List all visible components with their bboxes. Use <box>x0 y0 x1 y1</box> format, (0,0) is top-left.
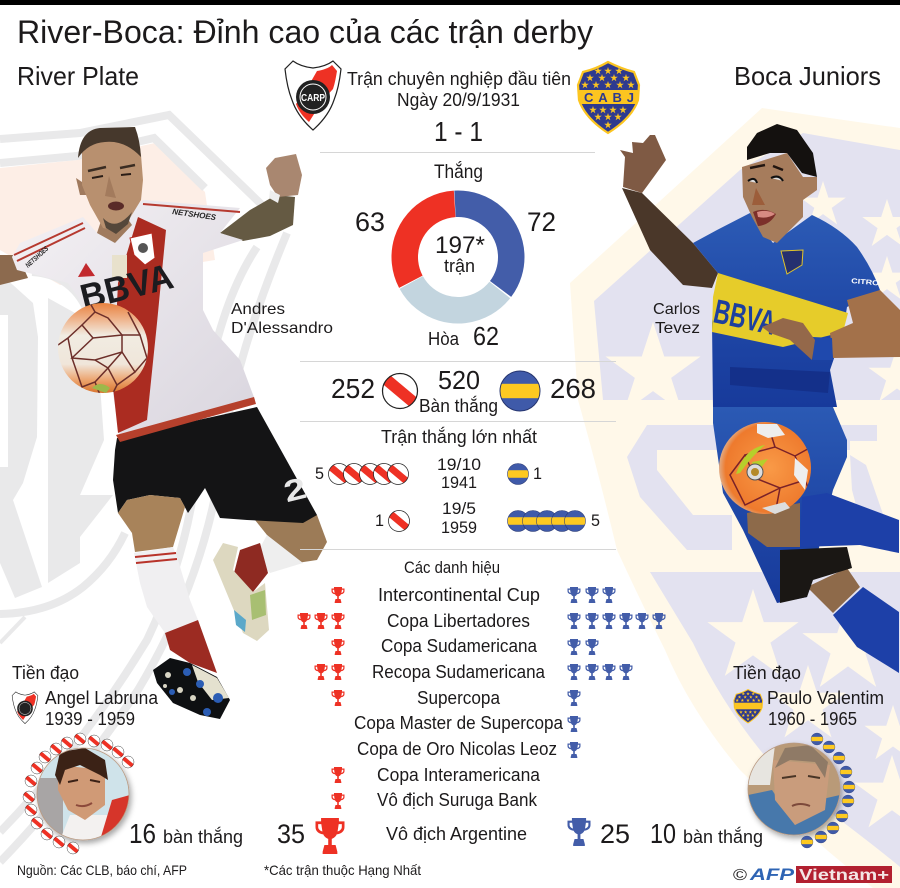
heading: River Plate: River Plate <box>17 61 139 91</box>
panel: River top scorer: 1939 - 1959 <box>45 709 135 729</box>
title names: Supercopa <box>417 688 501 708</box>
panel: Boca top scorer: Paulo Valentim <box>767 688 884 708</box>
icon: small River crest <box>12 692 38 724</box>
heading: wins: Thắng <box>434 161 483 183</box>
title names: Copa Interamericana <box>377 765 541 785</box>
heading: main title: River-Boca: Đỉnh cao của các trận derby <box>17 14 593 50</box>
head <box>76 127 143 243</box>
biggest wins: 1959 <box>441 518 477 537</box>
titles table <box>277 558 666 854</box>
jersey crest <box>781 250 803 274</box>
photo: Paulo Valentim <box>748 743 840 840</box>
icon: River Plate crest: CARP <box>301 93 325 104</box>
title names: Copa Master de Supercopa <box>354 713 564 733</box>
donut chart: wins and draws <box>355 161 556 351</box>
biggest wins: 1 <box>533 464 542 483</box>
background: Boca Juniors crest watermark <box>570 108 900 888</box>
title names: Recopa Sudamericana <box>372 662 546 682</box>
panel: River top scorer: Angel Labruna <box>45 688 159 708</box>
goals comparison: Bàn thắng <box>419 395 498 416</box>
title names: Copa Sudamericana <box>381 636 538 656</box>
icon: Boca Juniors crest <box>578 62 639 133</box>
biggest wins: Trận thắng lớn nhất <box>381 426 537 447</box>
text block: first professional match: Trận chuyên nghiệp đầu tiên <box>347 69 571 89</box>
jersey logos: NETSHOES <box>172 207 217 222</box>
goals comparison <box>331 365 596 416</box>
biggest wins: 19/10 <box>437 455 481 474</box>
head <box>742 124 817 243</box>
icon: small Boca crest <box>734 690 763 723</box>
River scorer goals: 16 <box>129 818 156 849</box>
jersey <box>693 213 880 407</box>
shorts number: 2 <box>280 472 310 509</box>
heading: titles: Các danh hiệu <box>404 558 500 577</box>
football <box>719 422 815 514</box>
shorts <box>713 400 847 603</box>
player name: D'Alessandro <box>231 301 333 337</box>
total matches unit: trận <box>444 256 475 276</box>
jersey crest <box>130 233 155 265</box>
title names <box>354 585 564 844</box>
heading: Boca Juniors: Boca Juniors <box>734 61 881 91</box>
title names: Copa Libertadores <box>387 611 530 631</box>
text block: first professional match: 1 - 1 <box>434 116 483 147</box>
Boca 5 goals <box>508 510 586 532</box>
jersey logos: BBVA <box>76 255 177 318</box>
top black bar <box>0 0 900 5</box>
goals comparison: 520 <box>438 365 480 395</box>
title names: Intercontinental Cup <box>378 585 540 605</box>
Boca league titles: 25 <box>600 819 630 849</box>
player name: Tevez: Tevez <box>655 320 700 337</box>
text block: first professional match <box>347 69 571 147</box>
panel: Boca top scorer: 1960 - 1965 <box>768 709 857 729</box>
biggest wins: 5 <box>315 464 324 483</box>
sleeve logo: CITRO <box>851 278 880 287</box>
biggest wins: 1941 <box>441 473 477 492</box>
thigh <box>747 503 800 547</box>
credit: AFP Vietnam+: AFP <box>749 865 795 884</box>
icon: Boca ball <box>500 371 540 411</box>
raised arm <box>620 135 718 288</box>
panel: Boca top scorer <box>650 663 884 849</box>
player name: Tevez <box>653 301 700 337</box>
sponsor text: BBVA <box>710 293 779 343</box>
River trophies <box>298 587 344 854</box>
Boca scorer goals <box>650 818 763 849</box>
total matches: 197* <box>435 232 485 259</box>
forearm and hand <box>762 290 900 360</box>
Boca trophies <box>568 587 666 846</box>
Boca goal balls <box>801 733 855 848</box>
shorts <box>113 407 317 523</box>
goals comparison: 252 <box>331 373 375 404</box>
text block: first professional match: Ngày 20/9/1931 <box>397 90 520 110</box>
yellow band <box>712 273 848 347</box>
goals comparison: 268 <box>550 373 596 404</box>
River scorer goals: bàn thắng <box>163 826 243 847</box>
player name: D'Alessandro: D'Alessandro <box>231 320 333 337</box>
River 5 goals <box>326 462 411 486</box>
title names: Vô địch Argentine <box>386 824 527 844</box>
credit: AFP Vietnam+: © <box>733 867 747 884</box>
biggest wins: 5 <box>591 511 600 530</box>
right arm <box>220 195 295 241</box>
Boca wins: 72 <box>527 207 556 237</box>
jersey logos: NETSHOES <box>25 245 50 269</box>
donut segments <box>383 182 533 332</box>
title names: Vô địch Suruga Bank <box>377 790 538 810</box>
draws number: 62 <box>473 321 499 351</box>
Boca scorer goals: 10 <box>650 818 676 849</box>
footnote: *Các trận thuộc Hạng Nhất <box>264 862 421 878</box>
lower right leg <box>807 568 860 613</box>
Boca scorer goals: bàn thắng <box>683 826 763 847</box>
player: Andres D'Alessandro <box>0 127 327 719</box>
icon: River ball <box>378 371 422 411</box>
right leg and boot <box>213 510 327 641</box>
left arm <box>0 255 28 285</box>
jersey logos <box>25 207 217 318</box>
biggest wins <box>315 426 600 537</box>
biggest wins: 19/5 <box>442 499 476 518</box>
River scorer goals <box>129 818 243 849</box>
River goal balls <box>21 732 136 855</box>
River league titles: 35 <box>277 819 305 849</box>
left leg and boot <box>118 495 230 719</box>
upper sock <box>800 493 899 553</box>
title names: Copa de Oro Nicolas Leoz <box>357 739 557 759</box>
source note: Nguồn: Các CLB, báo chí, AFP <box>17 862 187 878</box>
panel: River top scorer: Tiền đạo <box>12 663 79 683</box>
panel: Boca top scorer: Tiền đạo <box>733 663 801 683</box>
football <box>58 303 148 395</box>
player name: Tevez: Carlos <box>653 301 700 318</box>
River wins: 63 <box>355 207 385 237</box>
photo: Angel Labruna <box>37 748 130 840</box>
icon: Boca Juniors crest: CABJ <box>584 90 634 105</box>
icon: River Plate crest <box>285 61 341 130</box>
draws: Hòa <box>428 329 460 349</box>
biggest wins: 1 <box>375 511 384 530</box>
credit: AFP Vietnam+ <box>733 865 892 884</box>
credit: AFP Vietnam+: Vietnam+ <box>799 867 889 884</box>
under shorts <box>780 547 852 603</box>
panel: River top scorer <box>12 663 243 855</box>
player name: D'Alessandro: Andres <box>231 301 285 318</box>
background: River Plate crest watermark <box>0 115 287 862</box>
player: Carlos Tevez <box>620 124 900 673</box>
jersey <box>12 200 255 438</box>
